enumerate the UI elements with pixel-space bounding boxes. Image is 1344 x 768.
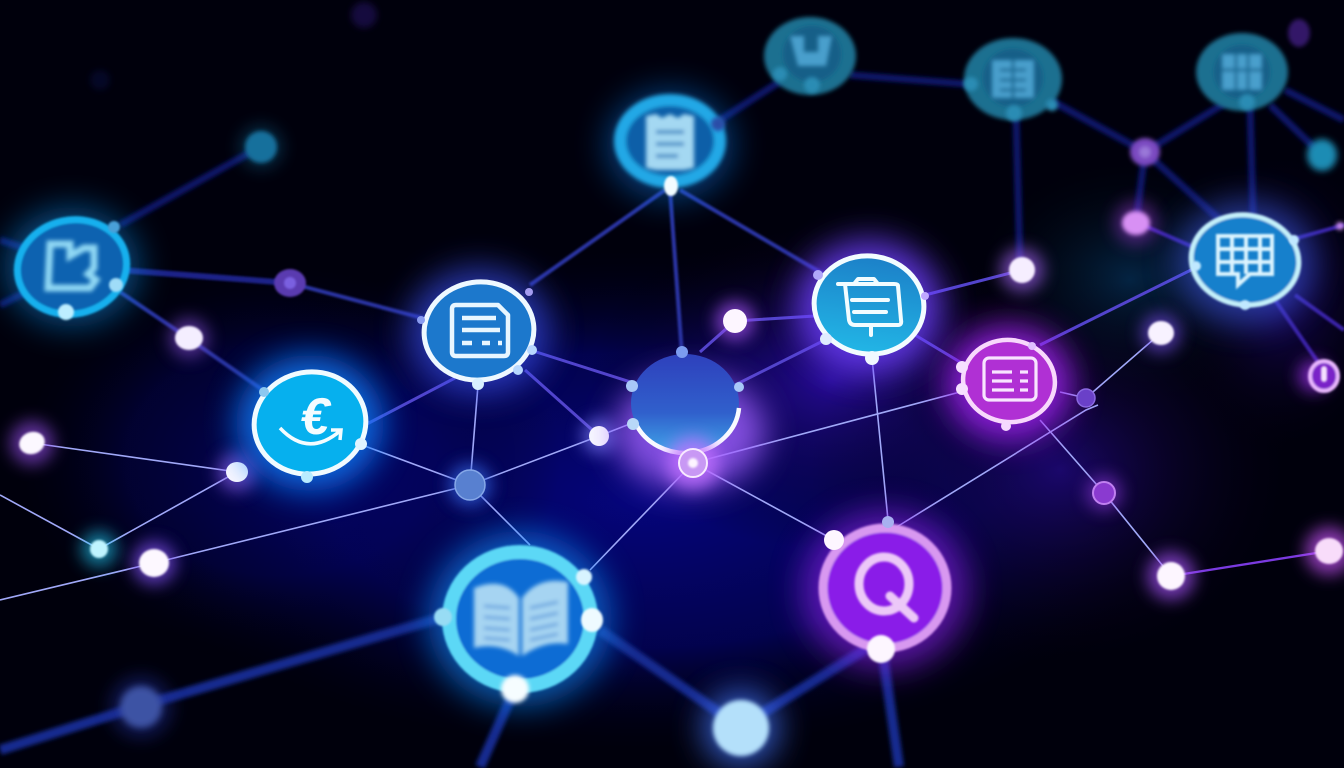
icon: right chat grid node bbox=[1175, 200, 1315, 324]
icon: open book node bbox=[428, 531, 612, 707]
soft far connections bbox=[0, 75, 1344, 305]
node: background blurred dots top bbox=[90, 2, 1310, 90]
purple connections bbox=[1171, 551, 1329, 576]
small node: top right white dot bbox=[1000, 248, 1044, 292]
icon: euro node: € bbox=[301, 388, 332, 446]
icon: purple search node bbox=[801, 510, 969, 670]
left mid connections bbox=[120, 270, 290, 283]
small nodes: right purple group bbox=[1077, 313, 1344, 600]
centre mid connections bbox=[365, 268, 1195, 436]
small node: far left top teal bbox=[239, 125, 283, 169]
icon: top right cart node bbox=[1196, 33, 1288, 111]
large foreground node bottom bbox=[703, 690, 779, 766]
icon: purple list node bbox=[945, 325, 1073, 441]
icon: top centre document node bbox=[606, 89, 734, 201]
icon: top cart node bbox=[764, 17, 856, 95]
small nodes: centre top bbox=[715, 301, 755, 341]
small nodes: top right cluster bbox=[1114, 138, 1344, 245]
small nodes: left group bbox=[10, 269, 306, 585]
purple-tinted side connections bbox=[1136, 222, 1344, 365]
blurred foreground node bottom left bbox=[109, 675, 173, 739]
fine bright connections bbox=[0, 333, 1171, 600]
icon: right edge purple node bbox=[1298, 360, 1338, 392]
icon: sign board node bbox=[795, 239, 943, 375]
small node: central junction blue bbox=[448, 463, 492, 507]
icon: left receipt node bbox=[4, 207, 140, 327]
central glowing sphere bbox=[614, 346, 766, 490]
small node: white dot by sphere bbox=[581, 418, 617, 454]
small node: ring under sphere bbox=[667, 437, 719, 489]
blurred foreground connections bbox=[0, 618, 899, 767]
icon: euro node bbox=[236, 355, 384, 491]
icon: top book node bbox=[964, 38, 1062, 121]
icon: document node bbox=[407, 267, 551, 395]
